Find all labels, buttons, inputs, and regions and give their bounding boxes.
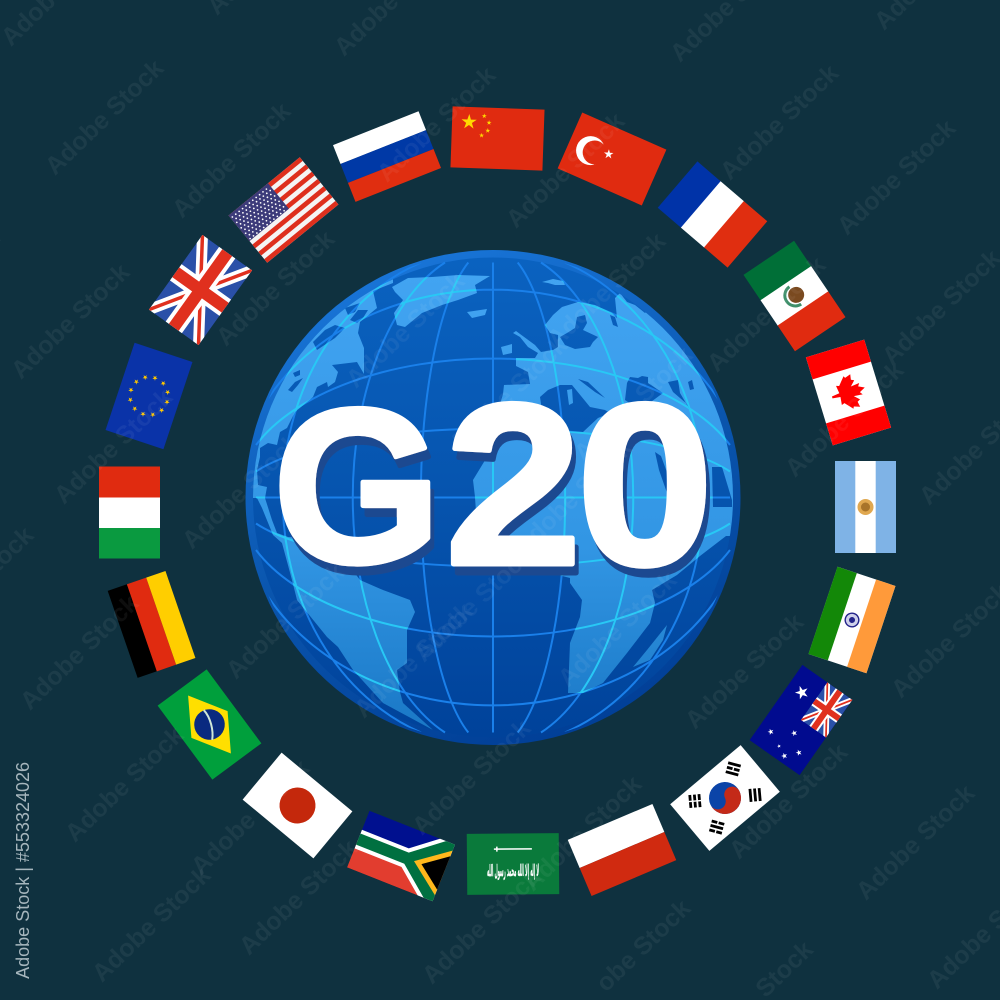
stock watermarks: Adobe Stock xyxy=(40,54,169,180)
stock watermarks: Adobe Stock xyxy=(553,566,682,692)
flag: Brazil xyxy=(158,669,261,780)
stock watermarks: Adobe Stock xyxy=(417,863,546,989)
stock watermarks: Adobe Stock xyxy=(542,227,671,353)
stock watermarks: Adobe Stock xyxy=(6,258,135,384)
title: G20: G xyxy=(273,364,441,609)
stock watermarks: Adobe Stock xyxy=(409,541,538,667)
stock watermarks: Adobe Stock xyxy=(444,331,573,457)
stock watermarks: Adobe Stock xyxy=(177,428,306,554)
flag: United Kingdom xyxy=(149,235,252,345)
stock watermarks: Adobe Stock xyxy=(49,383,178,509)
stock watermarks: Adobe Stock xyxy=(407,714,536,840)
stock watermarks: Adobe Stock xyxy=(167,97,296,223)
stock watermarks: Adobe Stock xyxy=(509,434,638,560)
stock watermarks: obe Stock xyxy=(591,894,696,997)
stock watermarks: Adobe Stock xyxy=(569,341,698,467)
stock watermarks: Adobe Stock xyxy=(851,779,980,905)
flag: United States xyxy=(229,157,338,263)
flag: India xyxy=(808,567,895,673)
vertical stock credit: Adobe Stock | #553324026 xyxy=(13,762,33,979)
stock watermarks: Adobe Stock xyxy=(234,834,363,960)
flag: Poland xyxy=(568,804,676,896)
stock watermarks: Adobe Stock xyxy=(60,721,189,847)
flag: Turkey xyxy=(558,113,666,205)
flag: South Africa xyxy=(347,811,455,901)
stock watermarks: Adobe Stock xyxy=(832,114,961,240)
infographic canvas: لا إله إلا الله محمد رسول الله xyxy=(487,861,539,880)
stock watermarks: Adobe Stock xyxy=(715,59,844,185)
stock watermarks: Adobe Stock xyxy=(221,558,350,684)
globe grid lines over land xyxy=(256,275,730,693)
flag: Russia xyxy=(333,111,441,202)
flag: Saudi Arabia xyxy=(467,833,559,895)
world map land masses xyxy=(253,275,733,730)
flag: Italy xyxy=(99,466,160,558)
stock watermarks: Adobe Stock xyxy=(186,754,315,880)
flag: Argentina xyxy=(835,461,896,553)
stock watermarks: Adobe Stock xyxy=(341,267,470,393)
stock watermarks: Adobe Stock xyxy=(680,608,809,734)
stock watermarks: Adobe Stock xyxy=(501,107,630,233)
flag: South Korea xyxy=(670,745,780,851)
stock watermarks: Adobe Stock xyxy=(372,61,501,187)
flag: Japan xyxy=(243,753,352,858)
globe xyxy=(225,250,775,745)
stock watermarks: Adobe Stock xyxy=(724,738,853,864)
flag: Canada xyxy=(806,340,891,445)
flag: Australia xyxy=(750,665,852,775)
stock watermarks: Adobe Stock xyxy=(15,589,144,715)
flag: China xyxy=(450,106,545,171)
title: G20: 20 xyxy=(445,356,713,613)
flag: European Union xyxy=(106,343,192,449)
globe grid lines over ocean xyxy=(256,262,730,732)
flag: France xyxy=(658,161,767,268)
stock watermarks: Adobe Stock xyxy=(702,251,831,377)
title: G20 xyxy=(273,356,713,613)
flag: Mexico xyxy=(743,241,846,351)
stock watermarks: Adobe Stock xyxy=(518,770,647,896)
stock watermarks: Adobe Stock xyxy=(349,597,478,723)
stock watermarks: Adobe Stock xyxy=(780,356,909,482)
stock watermarks: Adobe Stock xyxy=(211,225,340,351)
flag: Germany xyxy=(108,571,195,678)
stock watermarks: Adobe Stock xyxy=(87,861,216,987)
